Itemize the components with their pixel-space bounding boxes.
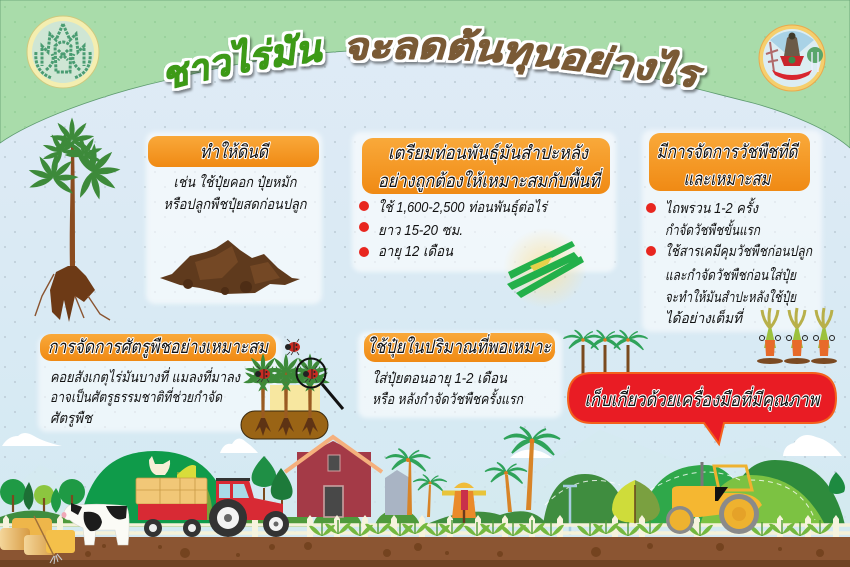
bullet list: จะทำให้มันสำปะหลังใช้ปุ๋ย <box>665 288 797 306</box>
body text <box>372 369 524 408</box>
panel heading: การจัดการศัตรูพืชอย่างเหมาะสม <box>48 336 269 358</box>
fence <box>0 515 850 537</box>
panel heading <box>40 334 276 361</box>
round tree <box>612 480 660 525</box>
panel: prepare cuttings <box>352 132 616 308</box>
hay cart with chicken <box>136 456 207 537</box>
panel heading <box>364 333 555 362</box>
faint mountains <box>0 430 850 530</box>
cow <box>62 503 129 545</box>
sprinkler hills <box>543 460 845 525</box>
bullet list: ยาว 15-20 ซม. <box>378 223 463 239</box>
silo <box>385 470 410 515</box>
title: brown part: จะลดต้นทุนอย่างไร <box>346 25 710 94</box>
panel: fertilizer <box>358 332 562 418</box>
panel background <box>358 332 562 418</box>
body text: อาจเป็นศัตรูธรรมชาติที่ช่วยกำจัด <box>50 387 223 406</box>
icon: crop seedlings <box>757 308 837 364</box>
bullet list <box>359 198 549 260</box>
panel heading: เตรียมท่อนพันธุ์มันสำปะหลัง <box>388 142 590 164</box>
body text <box>50 367 241 427</box>
barn <box>285 437 382 517</box>
callout: harvest <box>568 373 836 444</box>
bullet list: และกำจัดวัชพืชก่อนใส่ปุ๋ย <box>665 266 797 284</box>
farm scene <box>0 427 850 567</box>
left palm <box>386 449 430 515</box>
panel background <box>146 132 322 304</box>
body text: ใส่ปุ๋ยตอนอายุ 1-2 เดือน <box>372 369 508 387</box>
big green dome <box>80 451 232 525</box>
left trees <box>0 479 85 525</box>
yellow-green dome <box>177 472 212 520</box>
ground band <box>0 537 850 567</box>
bullet list: ไถพรวน 1-2 ครั้ง <box>665 197 759 217</box>
seedlings <box>309 520 833 536</box>
panel heading <box>148 136 319 167</box>
panel heading: มีการจัดการวัชพืชที่ดี <box>656 138 800 162</box>
panel heading: และเหมาะสม <box>684 168 771 189</box>
panel: weed management <box>642 130 837 364</box>
bullet list: ใช้สารเคมีคุมวัชพืชก่อนปลูก <box>665 242 813 260</box>
right tree <box>829 472 845 494</box>
palms and scarecrow area <box>413 427 560 525</box>
panel: pest management <box>38 334 343 439</box>
bullet list: ใช้ 1,600-2,500 ท่อนพันธุ์ต่อไร่ <box>378 198 549 216</box>
trees near tractor <box>252 456 293 510</box>
yellow tractor <box>666 462 762 534</box>
green band behind fence <box>0 510 420 527</box>
callout: harvest: เก็บเกี่ยวด้วยเครื่องมือที่มีคุณภาพ <box>584 386 821 411</box>
panel heading: ใช้ปุ๋ยในปริมาณที่พอเหมาะ <box>367 333 552 358</box>
bullet list <box>646 197 813 327</box>
panel background <box>352 132 616 272</box>
scarecrow <box>442 482 486 527</box>
chicken <box>149 456 170 475</box>
panel background <box>38 336 282 432</box>
panel heading <box>362 138 610 194</box>
palm trees behind callout <box>563 330 648 375</box>
hay bales and pitchfork <box>0 516 75 564</box>
panel heading: ทำให้ดินดี <box>200 141 271 162</box>
panel: good soil <box>146 132 322 304</box>
logo: left department seal <box>27 16 99 88</box>
title: green part: ชาวไร่มัน <box>164 30 328 95</box>
panel heading: อย่างถูกต้องให้เหมาะสมกับพื้นที่ <box>378 167 604 192</box>
panel heading <box>649 133 810 191</box>
icon: cassava cuttings <box>503 228 587 308</box>
bullet list: ได้อย่างเต็มที่ <box>665 308 745 327</box>
sprinkler <box>563 486 577 535</box>
panel background <box>642 130 822 332</box>
illustration: pest inspection <box>241 339 343 439</box>
top green arc <box>0 0 850 148</box>
bullet list: กำจัดวัชพืชขั้นแรก <box>665 219 761 239</box>
body text: คอยสังเกตุไร่มันบางที่ แมลงที่มาลง <box>50 367 241 386</box>
body text: หรือ หลังกำจัดวัชพืชครั้งแรก <box>372 388 524 408</box>
body text: หรือปลูกพืชปุ๋ยสดก่อนปลูก <box>164 196 308 213</box>
body text: ศัตรูพืช <box>50 410 94 427</box>
soil specks <box>25 542 824 558</box>
icon: cassava plant <box>25 118 123 322</box>
body text <box>164 173 308 213</box>
body text: เช่น ใช้ปุ๋ยคอก ปุ๋ยหมัก <box>174 173 298 191</box>
red tractor <box>209 478 289 537</box>
clouds <box>2 433 842 458</box>
bullet list: อายุ 12 เดือน <box>378 243 454 260</box>
title <box>164 25 710 95</box>
icon: soil mound <box>160 240 300 295</box>
logo: right provincial seal <box>759 25 825 91</box>
